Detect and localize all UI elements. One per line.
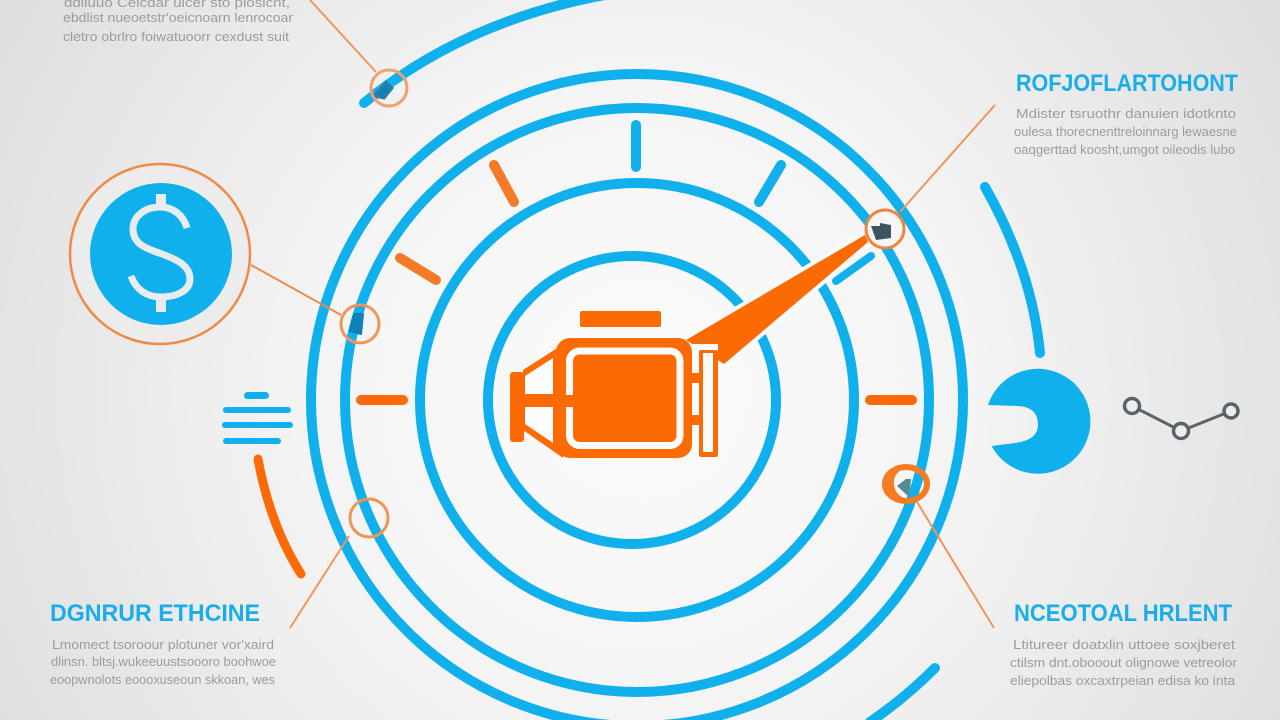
text block: bottom right: ctilsm dnt.obooout olignowe vetreolor bbox=[1010, 655, 1238, 670]
right arc bbox=[985, 187, 1040, 353]
orange arc left bbox=[258, 459, 301, 574]
marker: lower left with connector bbox=[290, 499, 388, 628]
text block: top right: Mdister tsruothr danuien idotknto bbox=[1016, 106, 1236, 121]
text block: bottom left: dlinsn. bltsj.wukeeuustsoooro boohwoe bbox=[51, 654, 276, 669]
text block: bottom right: Ltitureer doatxlin uttoee soxjberet bbox=[1013, 637, 1235, 652]
icon: dollar badge bbox=[70, 164, 250, 344]
bottom right arc bbox=[870, 668, 935, 720]
text block: top right bbox=[1014, 70, 1238, 157]
gauge tick marks bbox=[361, 125, 912, 400]
icon: engine bbox=[510, 311, 718, 458]
icon: notched circle bbox=[988, 369, 1090, 474]
gauge rings bbox=[311, 74, 963, 720]
gauge needle bbox=[686, 235, 868, 364]
marker: needle tip with connector bbox=[866, 105, 995, 248]
text block: bottom left: eoopwnolots eoooxuseoun skkoan, wes bbox=[50, 672, 275, 687]
text block: bottom right bbox=[1010, 600, 1238, 688]
heading: bottom left: DGNRUR ETHCINE bbox=[50, 600, 260, 627]
icon: connected nodes bbox=[1124, 398, 1238, 438]
marker: lower right with connector bbox=[885, 467, 994, 628]
text block: top left bbox=[63, 0, 294, 44]
heading: bottom right: NCEOTOAL HRLENT bbox=[1014, 600, 1232, 627]
heading: top right: ROFJOFLARTOHONT bbox=[1016, 70, 1238, 97]
icon: list lines bbox=[222, 392, 293, 444]
text block: bottom right: eliepolbas oxcaxtrpeian edisa ko inta bbox=[1010, 673, 1236, 688]
connector: dollar to ring bbox=[251, 265, 341, 315]
text block: bottom left bbox=[50, 600, 276, 687]
text block: top right: oulesa thorecnenttreloinnarg lewaesne bbox=[1014, 124, 1237, 139]
marker: top arc with connector bbox=[310, 0, 407, 106]
top arc bbox=[364, 0, 610, 103]
text block: top left: cletro obrlro foiwatuoorr cexdust suit bbox=[63, 29, 289, 44]
text block: bottom left: Lmomect tsoroour plotuner vor'xaird bbox=[52, 637, 274, 652]
marker: left ring bbox=[341, 305, 379, 343]
text block: top left: ebdlist nueoetstr'oeicnoarn lenrocoar bbox=[63, 10, 294, 25]
text block: top right: oaqgerttad koosht,umgot oileodis lubo bbox=[1014, 142, 1235, 157]
